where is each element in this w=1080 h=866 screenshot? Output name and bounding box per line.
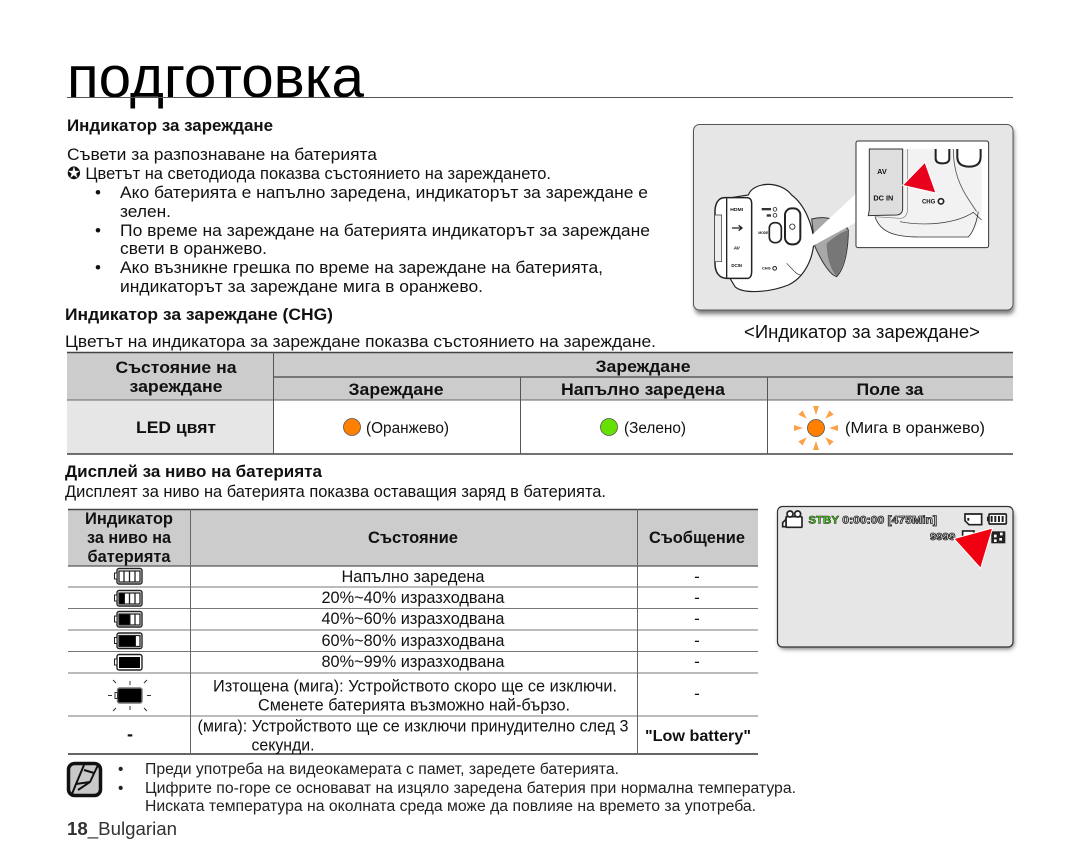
table: battery level: Изтощена (мига): Устройството скоро ще се изключи. (213, 676, 617, 696)
notes text: Цифрите по-горе се основават на изцяло заредена батерия при нормална температура. (145, 780, 796, 797)
icon: camcorder grip (812, 218, 848, 277)
panel: LCD display: 0:00:00 [475Min] (842, 514, 937, 526)
panel: zoomed detail inset: AV (877, 167, 887, 176)
notes text: • (118, 761, 123, 778)
status text: remaining photos: 9999 (930, 532, 956, 543)
status: blinking orange LED: (Мига в оранжево) (845, 420, 985, 437)
callout wedge (783, 192, 857, 262)
table: battery level: (мига): Устройството ще се изключи принудително след 3 (198, 716, 628, 736)
icon: battery status (987, 514, 1006, 524)
caption: camcorder illustration: <Индикатор за зареждане> (744, 321, 980, 342)
status: blinking orange LED (794, 406, 985, 450)
notes text: Преди употреба на видеокамерата с памет, заредете батерията. (145, 761, 619, 778)
table: charging status (67, 352, 1013, 454)
icon: side door with ports: AV (733, 246, 741, 251)
table: battery level: 80%~99% изразходвана (322, 652, 505, 671)
charging indicator text block: зелен. (120, 202, 171, 221)
table: charging status: LED цвят (136, 418, 216, 437)
charging indicator text block (67, 116, 650, 296)
charging indicator text block: Индикатор за зареждане (67, 116, 273, 135)
icon: battery full (114, 568, 142, 584)
table: battery level: - (694, 631, 700, 650)
panel: zoomed detail inset (856, 141, 989, 248)
charging indicator text block: • (95, 183, 101, 202)
table: battery level: Съобщение (649, 528, 745, 547)
icon: camcorder body (727, 184, 814, 292)
page number: 18_Bulgarian (67, 818, 177, 840)
charging indicator text block: свети в оранжево. (120, 239, 267, 258)
CHG indicator heading and description (65, 305, 656, 351)
panel: camcorder illustration (694, 124, 1014, 314)
battery level heading and description: Дисплей за ниво на батерията (65, 462, 323, 481)
table: battery level: 60%~80% изразходвана (322, 631, 505, 650)
icon: video camera (783, 511, 802, 527)
icon: side door with ports (715, 198, 752, 278)
CHG indicator heading and description: Индикатор за зареждане (CHG) (65, 305, 333, 324)
charging indicator text block: Ако батерията е напълно заредена, индикаторът за зареждане е (120, 183, 648, 202)
CHG indicator heading and description: Цветът на индикатора за зареждане показва състоянието на зареждане. (65, 332, 656, 351)
table: battery level: - (694, 684, 700, 703)
charging indicator text block: Съвети за разпознаване на батерията (67, 145, 378, 164)
battery level heading and description (65, 462, 606, 501)
panel: LCD display (778, 506, 1014, 649)
battery level heading and description: Дисплеят за ниво на батерията показва оставащия заряд в батерията. (65, 482, 606, 501)
table: charging status: Състояние на (116, 358, 237, 377)
charging indicator text block: Ако възникне грешка по време на зареждане на батерията, (120, 258, 603, 277)
table: battery level: секунди. (252, 736, 314, 754)
table: battery level: за ниво на (87, 528, 172, 547)
status: green LED (600, 418, 686, 437)
charging indicator text block: • (95, 258, 101, 277)
table: battery level: 20%~40% изразходвана (322, 588, 505, 607)
icon: battery 3/4 (114, 590, 142, 606)
table: battery level: Състояние (368, 528, 458, 547)
icon: mode switch and buttons (758, 207, 801, 275)
icon: battery exhausted blinking (108, 680, 151, 711)
icon: note (68, 764, 100, 796)
icon: battery 1/4 (114, 633, 142, 648)
table: charging status: Поле за (856, 380, 924, 399)
table: charging status: зареждане (130, 377, 222, 396)
table: battery level: - (127, 724, 133, 744)
table: charging status: Напълно заредена (561, 380, 726, 399)
panel: zoomed detail inset: DC IN (873, 194, 893, 203)
table: battery level: 40%~60% изразходвана (322, 609, 505, 628)
arrow: red pointer (954, 528, 993, 568)
table: battery level: Сменете батерията възможно най-бързо. (258, 696, 570, 714)
table: battery level: - (694, 567, 700, 586)
charging indicator text block: индикаторът за зареждане мига в оранжево. (120, 277, 483, 296)
notes text (118, 761, 796, 815)
icon: side door with ports: DCIN (731, 263, 742, 268)
icon: side door with ports: HDMI (730, 207, 744, 213)
icon: mode switch and buttons: CHG (762, 265, 771, 270)
table: battery level: батерията (88, 547, 171, 566)
icon: mode switch and buttons: MODE (758, 231, 769, 235)
icon: battery half (114, 612, 142, 627)
notes text: • (118, 780, 123, 797)
table: battery level: - (694, 609, 700, 628)
table: charging status: Зареждане (596, 357, 690, 376)
table: battery level: Индикатор (85, 509, 173, 528)
notes text: Ниската температура на околната среда може да повлияе на времето за употреба. (145, 798, 756, 815)
table: battery level: - (694, 588, 700, 607)
charging indicator text block: • (95, 221, 101, 240)
icon: battery low (114, 654, 142, 670)
charging indicator text block: ✪ Цветът на светодиода показва състоянието на зареждането. (67, 164, 551, 183)
status: orange LED: (Оранжево) (366, 420, 449, 437)
panel: zoomed detail inset: CHG (922, 199, 936, 205)
charging indicator text block: По време на зареждане на батерията индикаторът за зареждане (120, 221, 650, 240)
icon: photo size and quality (963, 531, 1005, 543)
table: battery level: - (694, 652, 700, 671)
icon: memory card (965, 514, 982, 525)
status: green LED: (Зелено) (624, 420, 686, 437)
title: подготовка (67, 45, 365, 110)
status text: standby and time: STBY (808, 514, 839, 526)
table: battery level: Напълно заредена (342, 567, 485, 586)
table: battery level (68, 509, 758, 754)
arrow: red pointer (903, 162, 936, 193)
table: battery level: "Low battery" (645, 728, 751, 745)
table: charging status: Зареждане (348, 380, 444, 399)
